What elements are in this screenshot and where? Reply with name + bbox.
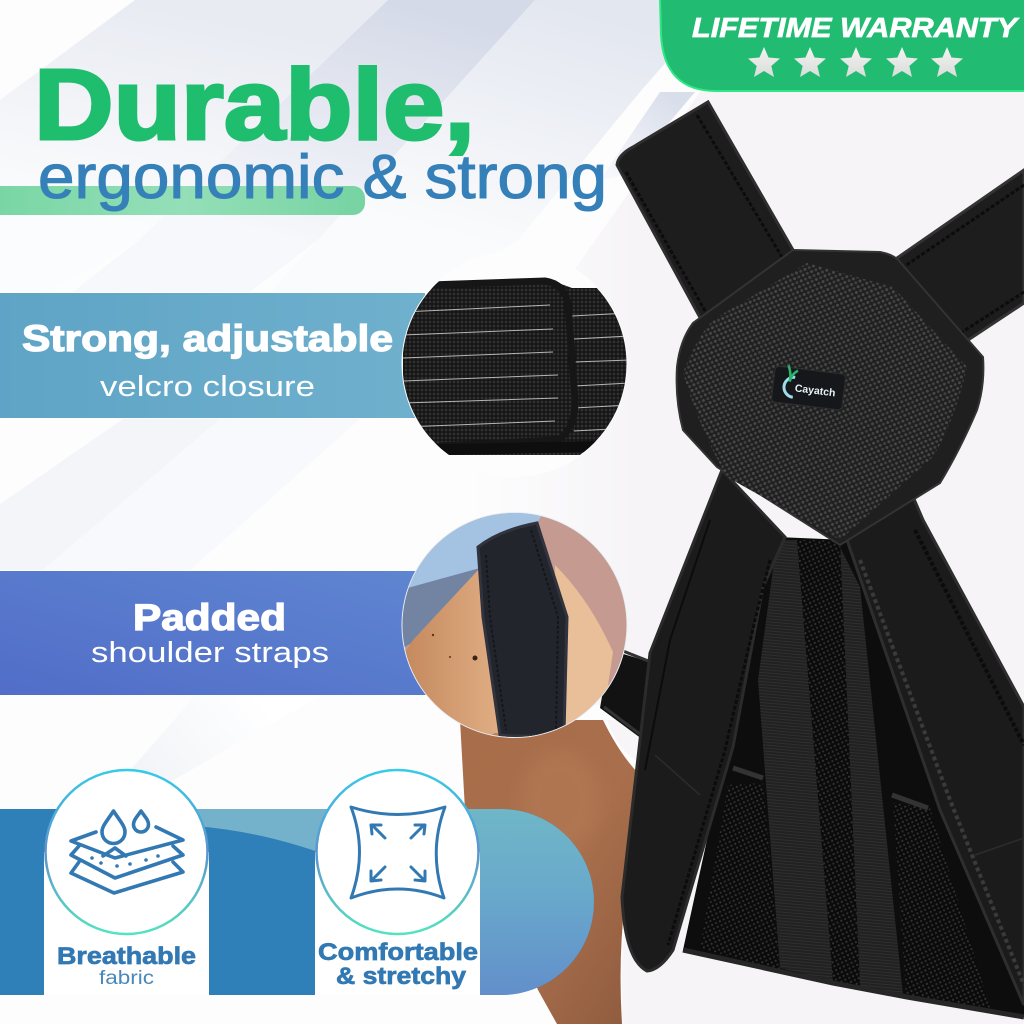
text: shoulder straps: shoulder straps (91, 637, 329, 669)
photo: velcro closure (402, 278, 628, 455)
product: posture brace (617, 102, 1024, 1017)
badge text: LIFETIME WARRANTY (692, 12, 1020, 43)
label: comfortable: Comfortable (318, 939, 478, 966)
arm (460, 720, 650, 1024)
title: Durable, (34, 49, 475, 161)
icon: stretching fabric (351, 807, 445, 898)
green highlight bar (0, 186, 365, 215)
feature card: breathable fabric (44, 770, 209, 995)
band: padded (0, 571, 430, 695)
brace: right upper strap (887, 170, 1024, 352)
text: velcro closure: velcro closure (100, 371, 315, 403)
brace: left lower strap (622, 470, 785, 971)
warranty badge (660, 0, 1024, 91)
brace: centre mesh panel (683, 537, 1024, 1017)
photo: padded shoulder strap (400, 510, 630, 745)
bottom features band (0, 809, 594, 995)
small rear strap (600, 650, 660, 745)
brace: logo label: Cayatch (794, 382, 836, 399)
label: breathable: Breathable (57, 943, 196, 970)
brace: logo label (771, 364, 846, 410)
brace: leather patch (683, 263, 967, 540)
five stars (748, 47, 963, 77)
band: strong adjustable (0, 293, 425, 418)
label: and stretchy: & stretchy (336, 963, 467, 990)
shirt-side background sliver (600, 92, 695, 180)
shirt (442, 92, 1024, 1024)
text: padded: Padded (133, 597, 286, 638)
brace: right lower strap (847, 478, 1024, 1005)
text: strong adjustable: Strong, adjustable (22, 318, 393, 359)
subtitle: ergonomic & strong (38, 143, 607, 212)
brace: left upper strap (617, 102, 797, 323)
label: fabric: fabric (99, 968, 154, 989)
brace: back plate (677, 250, 983, 545)
icon: water drops over fabric layers (71, 811, 183, 893)
feature card: comfortable stretchy (315, 770, 480, 995)
